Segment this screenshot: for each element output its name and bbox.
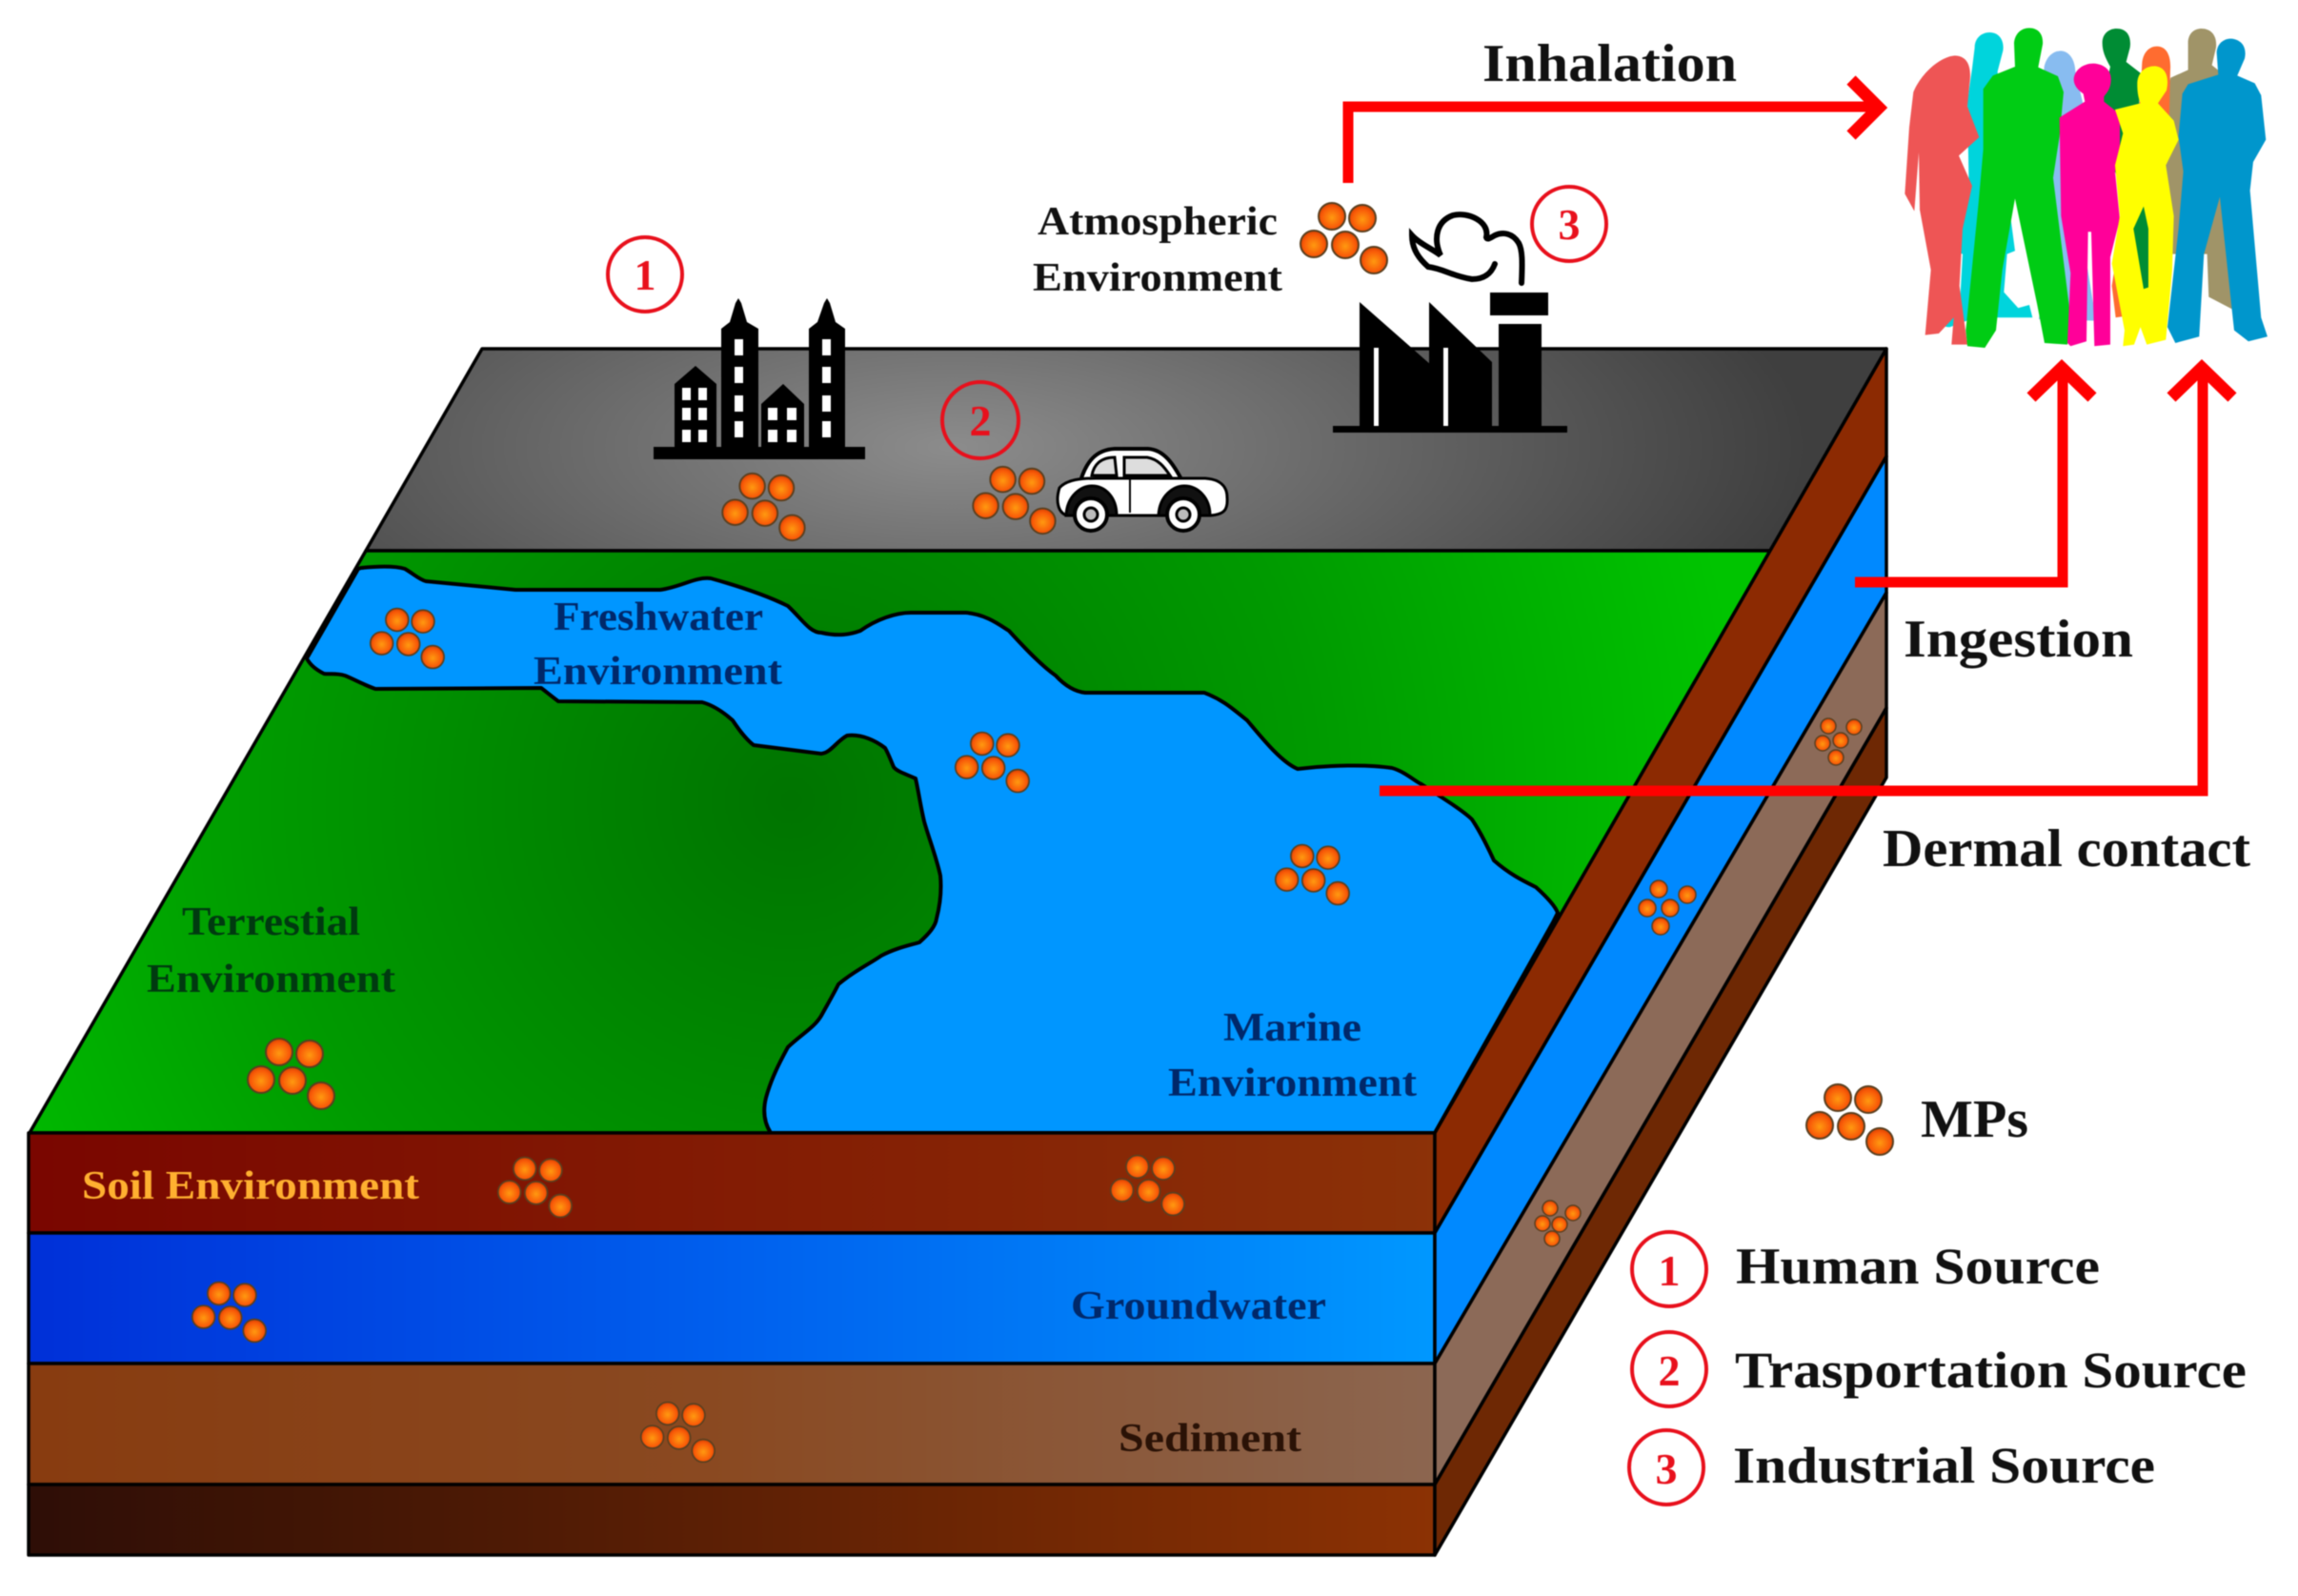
arrow: ingestion — [1855, 368, 2092, 582]
legend: human source — [1632, 1232, 2100, 1306]
cluster: marine — [1276, 845, 1349, 904]
icon: city buildings — [654, 298, 865, 459]
label: dermal contact: Dermal contact — [1883, 819, 2250, 879]
label: inhalation: Inhalation — [1482, 34, 1737, 93]
panel: layered environment block — [29, 349, 1886, 1555]
microplastic clusters on the surfaces — [192, 203, 1862, 1462]
cluster: side groundwater — [1639, 880, 1696, 935]
label: marine environment: Marine — [1223, 1006, 1361, 1050]
person: cyan — [1935, 32, 2032, 327]
marker 2 — [942, 382, 1018, 458]
arrow: inhalation — [1348, 80, 1879, 183]
cluster: groundwater — [192, 1283, 266, 1342]
cluster: soil right — [1111, 1156, 1184, 1215]
cluster: city — [722, 474, 805, 540]
marker 1: 1 — [635, 251, 655, 299]
marker 3 — [1532, 187, 1606, 261]
label: marine environment — [1168, 1006, 1417, 1105]
numbered source markers — [608, 187, 1606, 458]
legend: MPs — [1806, 1084, 2028, 1155]
cluster: sediment — [641, 1403, 715, 1462]
person: blue — [2167, 39, 2268, 343]
person: magenta — [2060, 64, 2120, 346]
legend — [1629, 1084, 2247, 1505]
icon: car — [1058, 449, 1227, 531]
side layer: groundwater — [1435, 456, 1886, 1364]
person: orange — [2112, 47, 2170, 317]
side layer: soil — [1435, 349, 1886, 1233]
cluster: side sediment lower — [1535, 1201, 1581, 1246]
cluster: road — [973, 467, 1056, 534]
icon: factory with smoke — [1333, 214, 1567, 433]
arrow: dermal contact — [1380, 368, 2232, 791]
cluster: terrestrial — [248, 1039, 334, 1109]
marker 1 — [608, 237, 682, 312]
person: yellow — [2112, 66, 2179, 346]
exposure route labels — [1482, 34, 2250, 879]
legend: transportation source: 2 — [1658, 1346, 1681, 1395]
cluster: atmosphere — [1300, 203, 1387, 273]
front layer: sediment — [29, 1364, 1435, 1485]
environment labels — [82, 200, 1417, 1461]
marker 3: 3 — [1559, 200, 1580, 249]
legend: industrial source — [1629, 1430, 2155, 1505]
label: ingestion: Ingestion — [1904, 610, 2133, 669]
person: dark green — [2103, 29, 2150, 286]
label: groundwater: Groundwater — [1071, 1284, 1326, 1328]
label: freshwater environment: Environment — [534, 650, 782, 694]
label: atmospheric environment: Atmospheric — [1038, 200, 1278, 244]
river and marine water body — [307, 567, 1558, 1133]
cluster: side sediment upper — [1815, 718, 1862, 765]
marker 2: 2 — [970, 396, 991, 445]
legend: MPs: MPs — [1921, 1090, 2028, 1149]
side layer: bedrock — [1435, 708, 1886, 1555]
person: salmon — [1905, 55, 1979, 345]
cluster: soil left — [498, 1158, 572, 1217]
cluster: river mid — [956, 733, 1029, 792]
legend: transportation source — [1632, 1332, 2247, 1406]
cluster: river upper — [371, 609, 444, 668]
side layer: sediment — [1435, 593, 1886, 1485]
label: terrestrial environment: Terrestial — [182, 900, 360, 944]
icon: group of people silhouettes — [1905, 28, 2268, 348]
gray urban surface — [366, 349, 1886, 551]
person: green — [1965, 28, 2070, 348]
front layer: groundwater — [29, 1233, 1435, 1364]
label: marine environment: Environment — [1168, 1061, 1417, 1105]
person: light blue — [2039, 51, 2096, 321]
legend: transportation source: Trasportation Source — [1735, 1342, 2247, 1399]
label: terrestrial environment: Environment — [147, 958, 395, 1001]
label: soil environment: Soil Environment — [82, 1164, 419, 1208]
label: freshwater environment — [534, 596, 782, 694]
legend: human source: Human Source — [1736, 1238, 2100, 1295]
front layer: bedrock — [29, 1485, 1435, 1555]
label: freshwater environment: Freshwater — [554, 596, 763, 639]
label: terrestrial environment — [147, 900, 395, 1001]
person: tan — [2163, 29, 2233, 310]
label: atmospheric environment: Environment — [1033, 256, 1282, 300]
legend: industrial source: Industrial Source — [1733, 1437, 2155, 1494]
green terrestrial surface — [30, 551, 1770, 1133]
label: atmospheric environment — [1033, 200, 1282, 300]
red exposure arrows — [1348, 80, 2232, 791]
front layer: soil — [29, 1133, 1435, 1233]
legend: industrial source: 3 — [1656, 1444, 1677, 1493]
label: sediment: Sediment — [1119, 1417, 1301, 1461]
legend: human source: 1 — [1658, 1246, 1681, 1295]
